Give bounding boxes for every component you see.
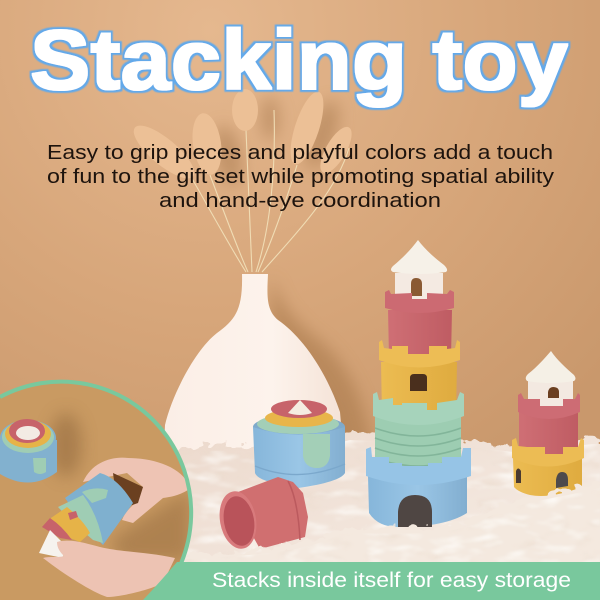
tower door (398, 495, 432, 527)
pink tier (385, 290, 454, 358)
grass shadows (209, 96, 345, 187)
fur texture (185, 440, 600, 556)
yellow tier (379, 340, 460, 415)
green ring (0, 382, 191, 600)
stacked nested cups (253, 400, 345, 488)
small castle tower (512, 351, 584, 496)
inset contents (0, 413, 190, 597)
vase shadow (270, 274, 372, 450)
front fur texture (244, 494, 599, 562)
fur silhouette (170, 432, 600, 600)
white top (391, 240, 447, 300)
large castle tower (366, 240, 471, 527)
table shadow (110, 490, 190, 560)
banner caption: Stacks inside itself for easy storage (212, 569, 571, 592)
lying tower (39, 473, 143, 558)
banner shape (143, 562, 600, 600)
small white top (526, 351, 576, 406)
vase (163, 274, 345, 470)
front fur silhouette (170, 482, 600, 590)
inset background (0, 382, 191, 600)
small yellow tier (512, 438, 584, 496)
grass heads (127, 88, 358, 186)
mint tier (373, 392, 464, 470)
inset photo circle (0, 382, 191, 600)
pink lying cup (215, 477, 308, 552)
description text: of fun to the gift set while promoting spatial ability (47, 166, 554, 188)
description text: and hand-eye coordination (159, 190, 441, 212)
bottom banner (143, 562, 600, 600)
grass stems (190, 110, 349, 272)
blue back rim (253, 415, 345, 439)
blue outer cup (253, 427, 345, 488)
white peak (288, 400, 312, 415)
lower hand (43, 541, 175, 597)
mint cup (257, 414, 339, 434)
yellow cup (265, 409, 333, 427)
mint notch ridges (303, 434, 330, 468)
blue base band (255, 464, 345, 475)
fur rug front (187, 484, 582, 559)
description text: Easy to grip pieces and playful colors add a touch (47, 142, 553, 164)
upper hand (83, 458, 188, 523)
pink cup (271, 400, 327, 418)
fur rug back (178, 430, 600, 557)
blue tier (366, 447, 471, 527)
title: Stacking toy (30, 13, 568, 107)
nested cups in inset (0, 419, 57, 483)
inset shadow (50, 413, 82, 477)
description text (47, 142, 554, 212)
dried pampas grass (127, 88, 358, 272)
small pink tier (518, 393, 580, 458)
